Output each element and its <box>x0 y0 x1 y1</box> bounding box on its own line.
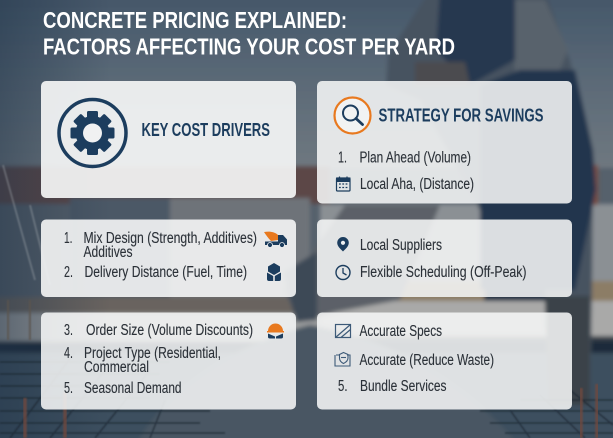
heading: key cost drivers: KEY COST DRIVERS <box>142 120 270 140</box>
list item: project type: Commercial <box>84 359 149 376</box>
list item: mix design <box>64 230 257 261</box>
concrete mound <box>135 325 520 438</box>
list item: bundle services <box>338 378 447 395</box>
list item: seasonal demand: 5. <box>64 380 73 397</box>
list item: order size: Order Size (Volume Discounts) <box>86 322 253 339</box>
list item: order size: 3. <box>64 322 73 339</box>
icon: map pin <box>337 237 349 252</box>
list item: bundle services: 5. <box>338 378 348 395</box>
title: CONCRETE PRICING EXPLAINED: <box>43 7 347 33</box>
icon: magnifier in orange ring <box>334 98 370 134</box>
icon: spec sheet <box>336 324 350 338</box>
panel: strategy for savings header <box>317 81 572 204</box>
list item: bundle services: Bundle Services <box>360 378 447 395</box>
icon: gear in ring <box>59 100 126 166</box>
list item: flexible scheduling: Flexible Scheduling (Off-Peak) <box>360 264 526 281</box>
panel: key cost drivers header <box>41 81 296 198</box>
list item: delivery distance: Delivery Distance (Fuel, Time) <box>84 264 247 281</box>
list item: local suppliers: Local Suppliers <box>360 237 442 254</box>
icon: box <box>267 263 281 281</box>
list item: seasonal demand: Seasonal Demand <box>84 380 182 397</box>
icon: mixer truck <box>264 232 287 248</box>
panel: savings suppliers and scheduling <box>317 220 572 297</box>
heading: strategy for savings: STRATEGY FOR SAVINGS <box>378 106 544 126</box>
list item: project type <box>64 345 221 376</box>
list item: mix design: Mix Design (Strength, Additives) <box>84 230 257 247</box>
title: FACTORS AFFECTING YOUR COST PER YARD <box>43 34 455 60</box>
icon: calendar <box>336 176 350 191</box>
worker <box>386 0 593 405</box>
list item: accurate specs: Accurate Specs <box>360 323 442 340</box>
chute <box>283 205 440 322</box>
list item: seasonal demand <box>64 380 182 397</box>
icon: hard hat on box <box>267 324 284 338</box>
title <box>43 7 455 60</box>
list item: plan ahead: Plan Ahead (Volume) <box>360 150 471 166</box>
list item: plan ahead <box>338 150 471 166</box>
list item: mix design: Additives <box>84 244 133 261</box>
panel: cost drivers 3-5 <box>41 312 296 410</box>
list item: project type: 4. <box>64 345 73 362</box>
list item: local aha: Local Aha, (Distance) <box>360 176 474 193</box>
list item: project type: Project Type (Residential, <box>84 345 221 362</box>
list item: delivery distance: 2. <box>64 264 73 281</box>
list item: mix design: 1. <box>64 230 72 247</box>
icon: clock <box>336 266 350 280</box>
list item: accurate reduce waste: Accurate (Reduce Waste) <box>360 352 494 369</box>
panel: cost drivers 1-2 <box>41 220 296 297</box>
panel: savings specs and bundling <box>317 312 572 410</box>
icon: waste reduction <box>335 352 350 366</box>
list item: plan ahead: 1. <box>338 150 347 166</box>
